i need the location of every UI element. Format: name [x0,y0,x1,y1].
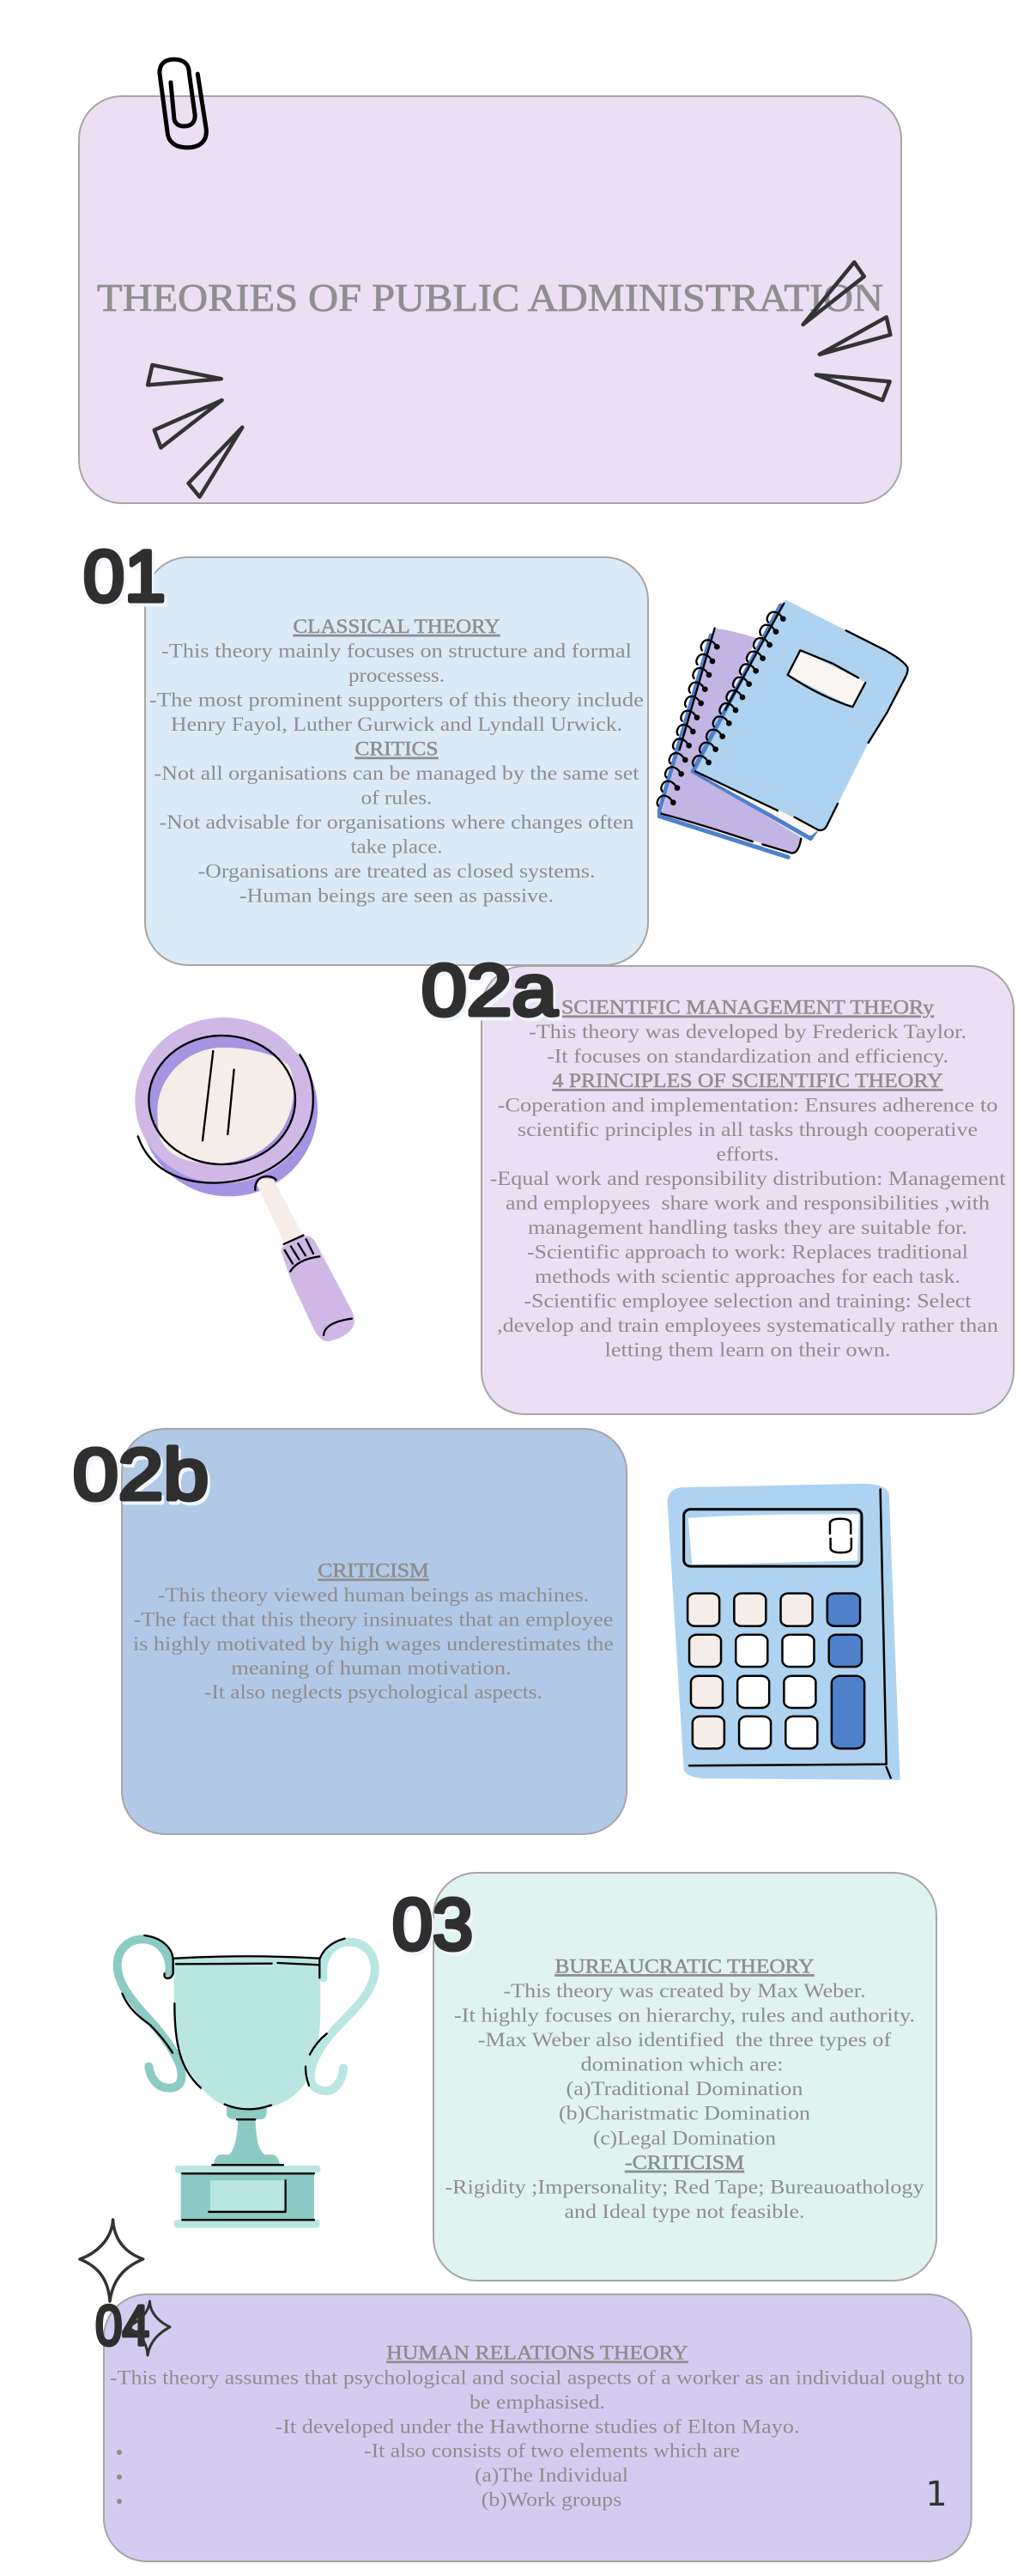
text: scientific management theory: efforts. [716,1144,779,1165]
text: classical theory: -Organisations are treated as closed systems. [197,860,596,882]
text: human relations theory: -It also consists of two elements which are [364,2440,740,2462]
text: human relations theory: -This theory assumes that psychological and social aspects of a worker as an individual ought to [110,2366,965,2388]
text: bureaucratic theory [445,1955,924,2222]
number: 03: 03 [392,1884,473,1965]
text: human relations theory: be emphasised. [470,2391,605,2413]
bullets [117,2450,122,2504]
text: scientific management theory: and emplopyees share work and responsibilities ,with [506,1193,991,1214]
text: bureaucratic theory: (c)Legal Domination [593,2127,777,2148]
number: 01: 01 [83,536,166,617]
icon: right burst marks [803,262,890,400]
text: classical theory: CLASSICAL THEORY [294,616,500,637]
icon: paperclip [160,59,206,148]
text: scientific management theory: -Scientific employee selection and training: Select [524,1291,972,1312]
panel: criticism [122,1429,627,1834]
text: criticism: -The fact that this theory insinuates that an employee [134,1608,613,1630]
text: classical theory [149,616,644,907]
number: 04: 04 [95,2293,149,2357]
text: scientific management theory: -Scientific approach to work: Replaces traditional [527,1242,968,1263]
text: bureaucratic theory: -CRITICISM [625,2152,744,2173]
text: bureaucratic theory: and Ideal type not feasible. [565,2201,805,2222]
text: criticism: is highly motivated by high wages underestimates the [133,1633,614,1655]
text: classical theory: take place. [350,835,443,857]
text: criticism [133,1560,614,1703]
text: scientific management theory: -It focuses on standardization and efficiency. [547,1046,948,1067]
title: THEORIES OF PUBLIC ADMINISTRATION [97,276,883,319]
text: bureaucratic theory: (a)Traditional Domination [566,2078,803,2099]
icon: large sparkle [80,2220,143,2301]
text: bureaucratic theory: BUREAUCRATIC THEORY [554,1955,815,1977]
text: human relations theory: (a)The Individual [475,2464,628,2486]
icon: small sparkle [127,2301,170,2355]
text: classical theory: of rules. [360,787,433,809]
number: 02a: 02a [421,950,557,1030]
text: bureaucratic theory: (b)Charistmatic Domination [559,2103,811,2124]
panel: classical theory [145,557,648,965]
text: bureaucratic theory: -Rigidity ;Impersonality; Red Tape; Bureauoathology [445,2176,924,2198]
icon: trophy [118,1935,375,2228]
icon: notebooks [657,599,908,857]
text: classical theory: -Human beings are seen as passive. [239,885,554,907]
text: scientific management theory: methods with scientic approaches for each task. [535,1266,960,1287]
text: criticism: -It also neglects psychological aspects. [204,1681,542,1703]
text: scientific management theory: -Coperation and implementation: Ensures adherence to [498,1095,997,1116]
number: 02b: 02b [73,1434,209,1515]
text: human relations theory: (b)Work groups [482,2489,621,2511]
icon: magnifying glass [135,1018,354,1341]
text: scientific management theory: -Equal work and responsibility distribution: Management [489,1168,1006,1189]
text: classical theory: Henry Fayol, Luther Gurwick and Lyndall Urwick. [171,714,622,735]
text: criticism: CRITICISM [318,1560,429,1582]
text: classical theory: processess. [348,665,445,686]
text: scientific management theory: 4 PRINCIPLES OF SCIENTIFIC THEORY [553,1070,943,1091]
panel: human relations theory [104,2294,972,2561]
page number: 1 [925,2475,948,2514]
text: scientific management theory: management handling tasks they are suitable for. [528,1217,967,1238]
text: bureaucratic theory: -Max Weber also identified the three types of [478,2029,892,2050]
text: scientific management theory: -This theory was developed by Frederick Taylor. [529,1021,966,1042]
text: human relations theory: HUMAN RELATIONS THEORY [386,2342,688,2364]
text: scientific management theory: letting them learn on their own. [604,1340,891,1361]
icon: calculator [668,1484,900,1780]
text: criticism: -This theory viewed human beings as machines. [158,1584,589,1606]
text: classical theory: -Not advisable for organisations where changes often [160,811,634,833]
text: bureaucratic theory: domination which are: [580,2054,783,2075]
text: scientific management theory: SCIENTIFIC MANAGEMENT THEORy [561,997,935,1018]
text: classical theory: -The most prominent supporters of this theory include [149,689,644,710]
text: bureaucratic theory: -It highly focuses on hierarchy, rules and authority. [454,2004,915,2026]
icon: left burst marks [148,365,242,497]
text: scientific management theory: ,develop and train employees systematically rather than [497,1315,999,1336]
text: scientific management theory: scientific principles in all tasks through cooperative [518,1119,978,1140]
text: bureaucratic theory: -This theory was created by Max Weber. [503,1980,865,2002]
text: human relations theory: -It developed under the Hawthorne studies of Elton Mayo. [275,2415,800,2437]
text: scientific management theory [489,997,1006,1361]
text: classical theory: CRITICS [355,738,438,760]
text: criticism: meaning of human motivation. [231,1657,512,1679]
panel: title [79,96,901,503]
text: human relations theory [110,2342,965,2511]
text: classical theory: -This theory mainly focuses on structure and formal [161,641,632,661]
panel: scientific management theory [482,966,1014,1414]
panel: bureaucratic theory [433,1873,936,2281]
text: classical theory: -Not all organisations can be managed by the same set [154,762,639,784]
